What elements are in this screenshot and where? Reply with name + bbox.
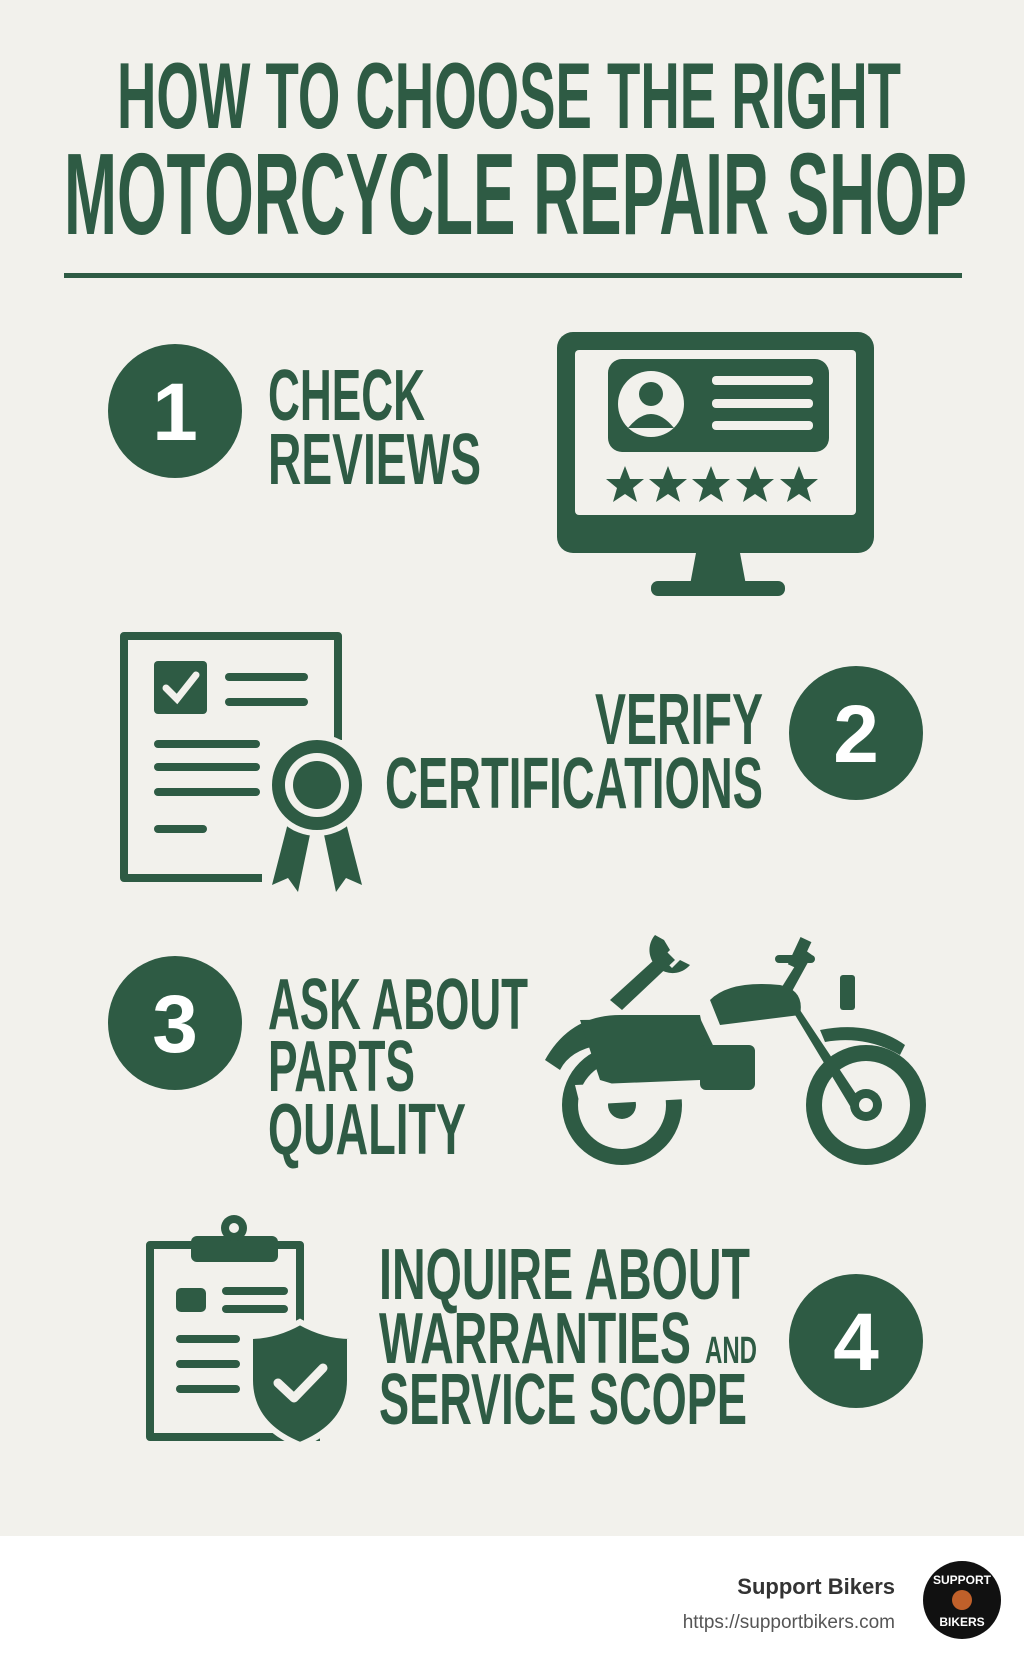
step 4 heading: WARRANTIES: [379, 1299, 691, 1379]
icon: clipboard with shield: [150, 1215, 350, 1445]
logo: [923, 1561, 1001, 1639]
step 1 heading: REVIEWS: [268, 420, 481, 500]
step 2 heading: CERTIFICATIONS: [385, 744, 763, 824]
step 3 heading: [268, 965, 528, 1170]
step 4 number badge: 4: [833, 1297, 879, 1388]
step 1 heading: [268, 356, 481, 500]
footer brand text: [683, 1574, 895, 1633]
title: [64, 43, 967, 259]
footer brand text: https://supportbikers.com: [683, 1612, 895, 1633]
step 4 heading: AND: [705, 1330, 757, 1372]
step 2 heading: VERIFY: [595, 680, 763, 760]
step 3 number badge: [108, 956, 242, 1090]
step 4 heading: INQUIRE ABOUT: [379, 1235, 750, 1315]
step 3 number badge: 3: [152, 979, 198, 1070]
step 3 heading: QUALITY: [268, 1090, 466, 1170]
step 2 number badge: [789, 666, 923, 800]
logo: SUPPORT: [933, 1573, 992, 1587]
icon: motorcycle with wrench: [545, 935, 926, 1165]
step 1 heading: CHECK: [268, 356, 425, 436]
step 4 heading: SERVICE SCOPE: [379, 1360, 747, 1440]
footer brand text: Support Bikers: [737, 1574, 895, 1599]
icon: monitor with reviews: [557, 332, 874, 596]
step 4 number badge: [789, 1274, 923, 1408]
icon: certificate: [124, 636, 365, 892]
step 3 heading: PARTS: [268, 1027, 415, 1107]
step 3 heading: ASK ABOUT: [268, 965, 528, 1045]
footer: [0, 1536, 1024, 1666]
step 4 heading: [379, 1235, 757, 1440]
step 2 heading: [385, 680, 763, 824]
logo: BIKERS: [939, 1615, 985, 1629]
step 2 number badge: 2: [833, 689, 879, 780]
step 1 number badge: 1: [152, 367, 198, 458]
step 1 number badge: [108, 344, 242, 478]
